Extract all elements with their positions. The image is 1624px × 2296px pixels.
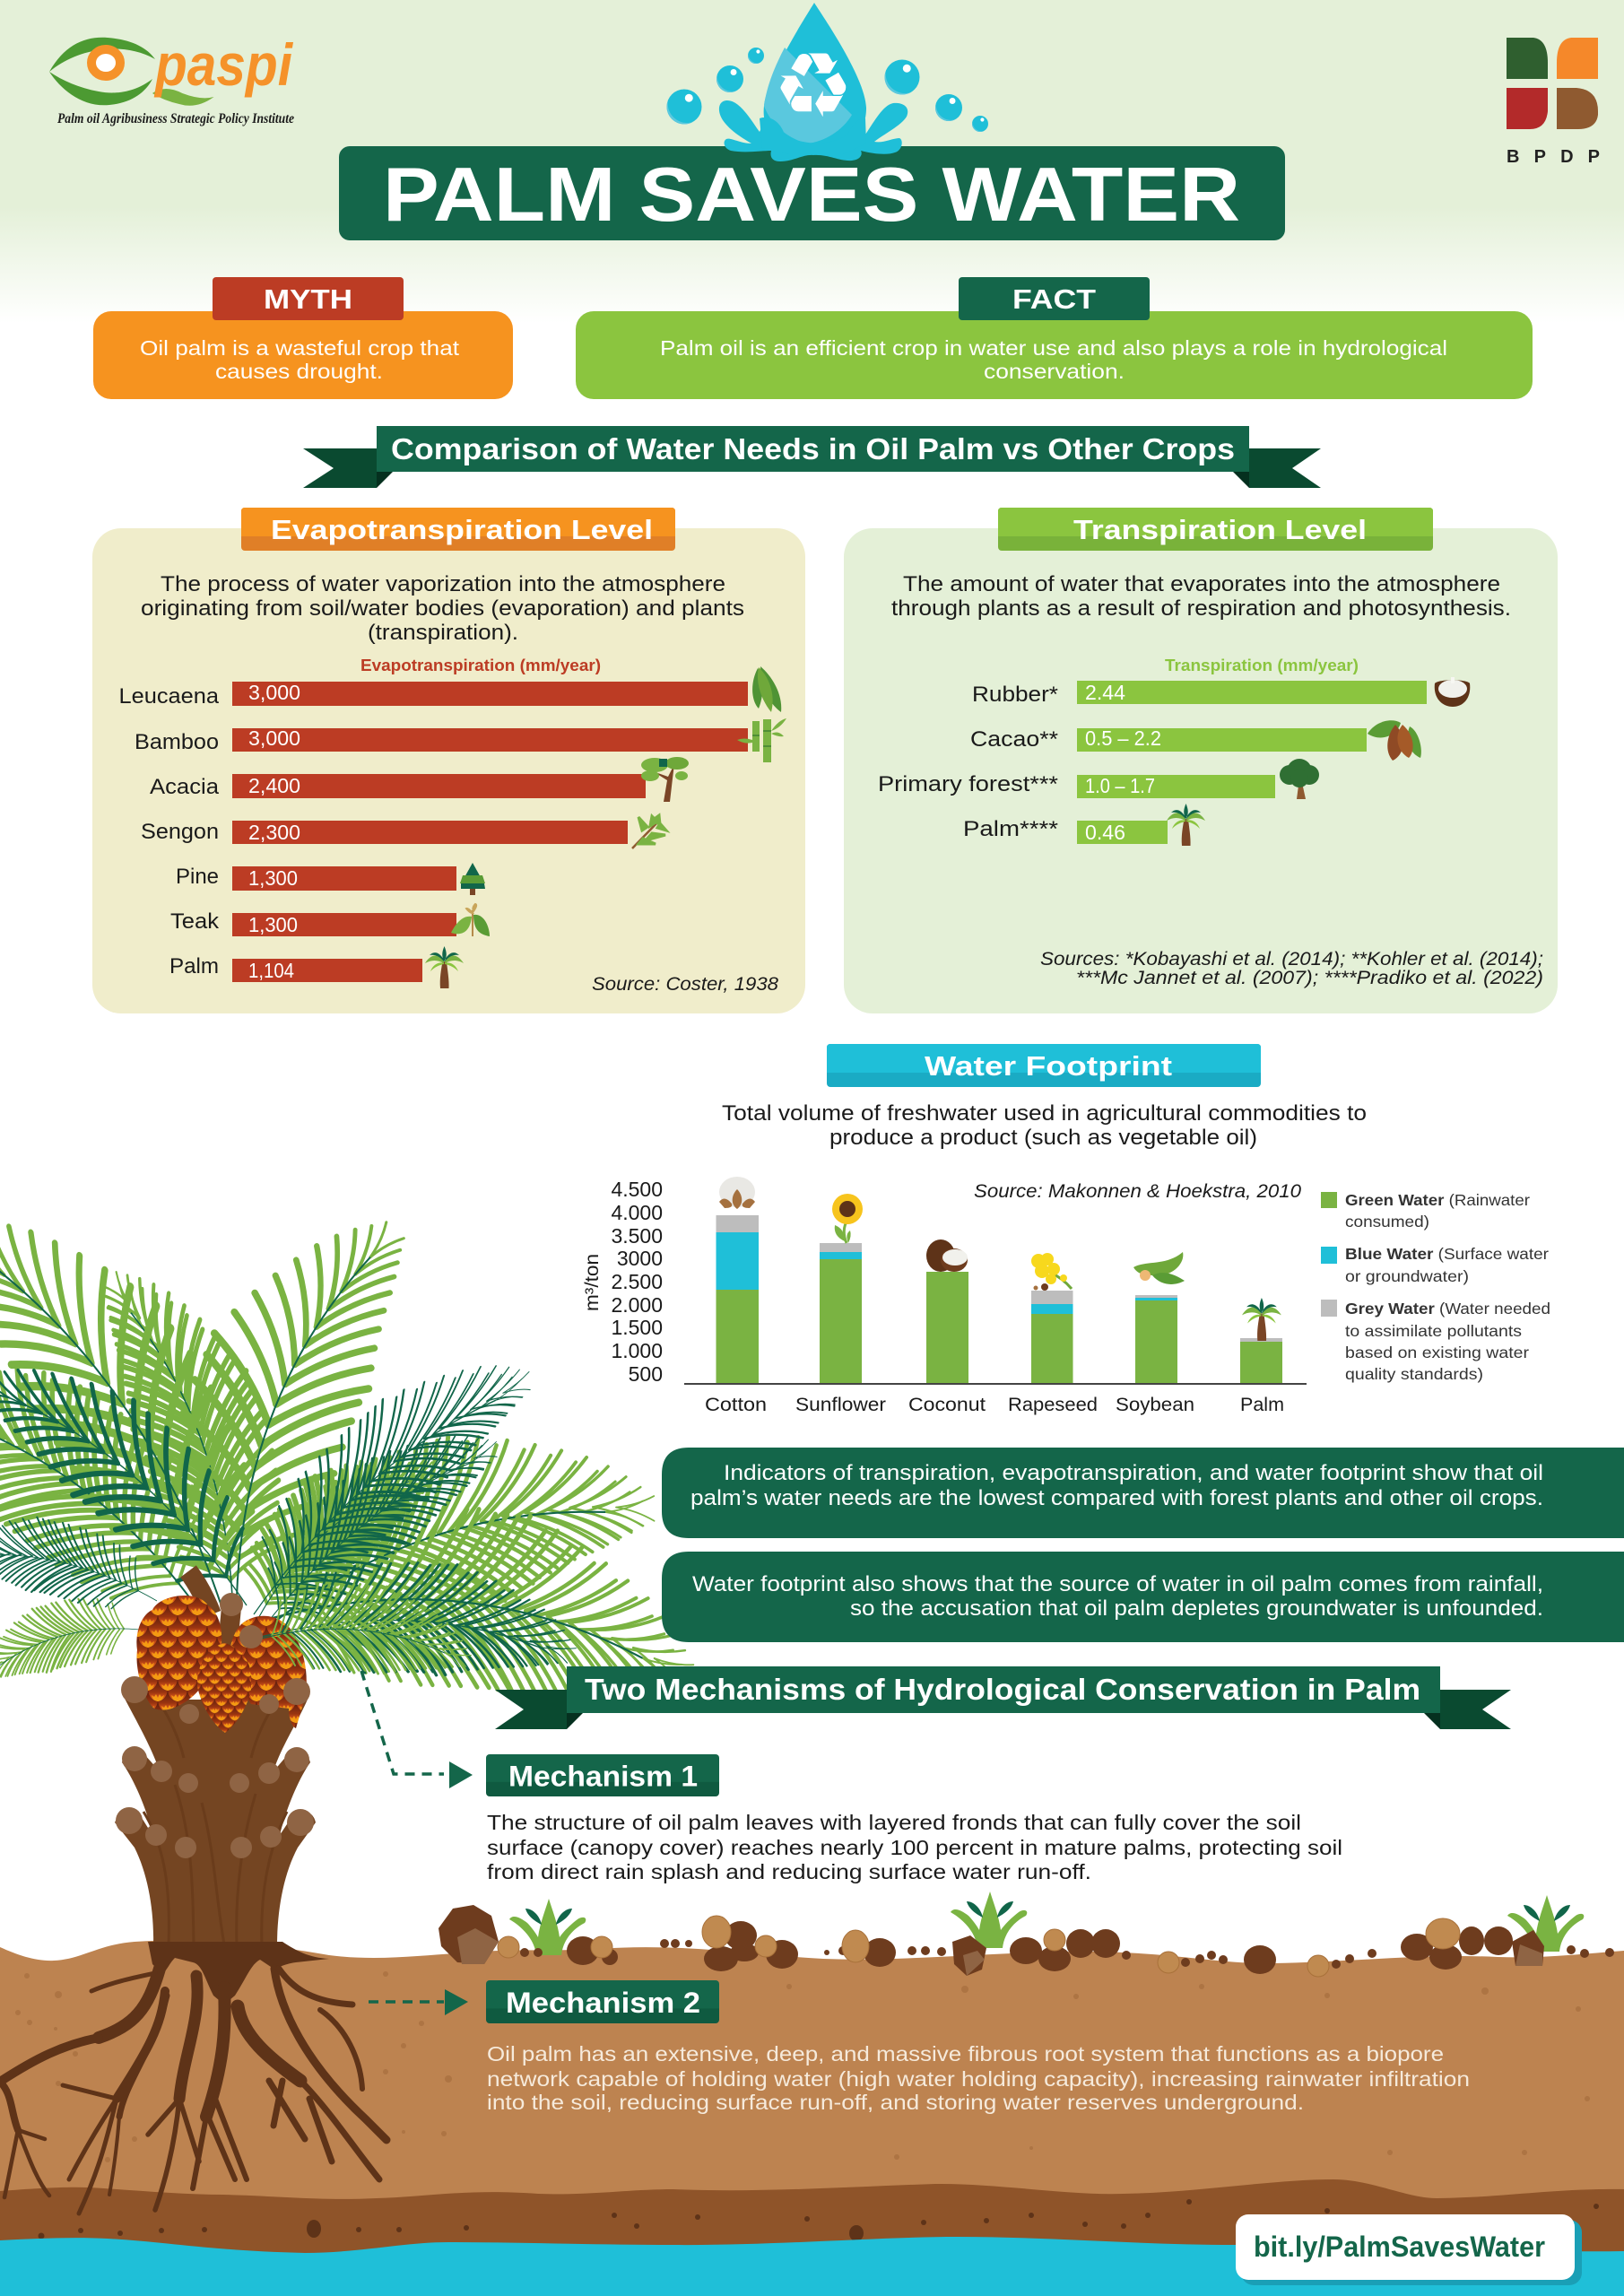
description text: (transpiration). bbox=[368, 621, 518, 645]
panel: mechanism 2: Mechanism 2 bbox=[506, 1987, 700, 2019]
palm trunk bbox=[115, 1683, 316, 1946]
stacked bar chart: m³/ton bbox=[582, 1254, 603, 1311]
heading ribbon: comparison: Comparison of Water Needs in Oil Palm vs Other Crops bbox=[391, 432, 1235, 465]
legend: to assimilate pollutants bbox=[1345, 1322, 1522, 1340]
icon: acacia tree bbox=[641, 757, 689, 802]
legend: or groundwater) bbox=[1345, 1267, 1469, 1285]
bar chart: evapotranspiration: 2,400 bbox=[248, 774, 300, 797]
callout: water needs: Indicators of transpiration, evapotranspiration, and water footprint show that oil bbox=[724, 1461, 1543, 1485]
panel: myth: causes drought. bbox=[215, 360, 383, 383]
panel: myth bbox=[93, 277, 513, 399]
icon: cacao bbox=[1368, 720, 1421, 761]
panel: mechanism 1: from direct rain splash and reducing surface water run-off. bbox=[487, 1860, 1091, 1883]
arrow: roots to mechanism 2 bbox=[369, 1989, 468, 2015]
link button: bit.ly/PalmSavesWater bbox=[1254, 2231, 1545, 2263]
source notes bbox=[1040, 949, 1543, 988]
icon: forest tree bbox=[1280, 759, 1319, 799]
stacked bar chart: 2.500 bbox=[611, 1270, 663, 1293]
header: water footprint: Water Footprint bbox=[925, 1050, 1172, 1082]
stacked bar chart: 1.500 bbox=[611, 1316, 663, 1339]
header: transpiration: Transpiration Level bbox=[1073, 514, 1367, 545]
logo: BPDP bbox=[1507, 38, 1600, 167]
ground plants and stones bbox=[439, 1892, 1614, 1977]
icon: soybean bbox=[1133, 1252, 1185, 1284]
palm stalks bbox=[188, 1571, 251, 1673]
icon: cotton bbox=[719, 1177, 755, 1209]
stacked bar chart: 4.500 bbox=[611, 1178, 663, 1201]
panel: mechanism 1: The structure of oil palm leaves with layered fronds that can fully cover the soil bbox=[487, 1811, 1301, 1834]
soil deep layer bbox=[0, 2179, 1624, 2296]
stacked bar chart: 500 bbox=[629, 1362, 663, 1386]
link button bbox=[1236, 2214, 1582, 2285]
icon: sunflower bbox=[832, 1194, 863, 1243]
icon: water drop with recycling symbol: ♻ bbox=[773, 33, 854, 138]
panel: transpiration level bbox=[844, 508, 1558, 1013]
panel: mechanism 2: Oil palm has an extensive, deep, and massive fibrous root system that functions as a biopore bbox=[487, 2042, 1444, 2066]
bar chart: evapotranspiration: Palm bbox=[169, 954, 219, 978]
icon: palm small bbox=[425, 946, 464, 988]
bar chart: transpiration: Palm**** bbox=[963, 817, 1058, 841]
panel: fact: FACT bbox=[1012, 283, 1096, 315]
bar chart: transpiration: 0.46 bbox=[1085, 821, 1125, 844]
stacked bar chart bbox=[582, 1178, 1307, 1415]
icon: pine tree bbox=[460, 863, 485, 895]
icon: palm small bbox=[1167, 804, 1205, 846]
palm roots bbox=[0, 1942, 386, 2213]
palm fronds back bbox=[0, 1162, 699, 1787]
legend: based on existing water bbox=[1345, 1344, 1529, 1361]
description text: Total volume of freshwater used in agricultural commodities to bbox=[722, 1101, 1367, 1126]
stacked bar chart: 4.000 bbox=[611, 1201, 663, 1224]
bar chart: transpiration: 0.5 – 2.2 bbox=[1085, 726, 1161, 750]
legend: consumed) bbox=[1345, 1213, 1429, 1231]
stacked bar chart: 1.000 bbox=[611, 1339, 663, 1362]
arrow: canopy to mechanism 1 bbox=[361, 1671, 473, 1788]
legend: Grey Water (Water needed bbox=[1345, 1300, 1550, 1318]
bar chart: transpiration: 2.44 bbox=[1085, 681, 1125, 704]
section: water footprint bbox=[582, 1044, 1550, 1415]
logo: paspi bbox=[49, 31, 294, 126]
icon: palm small bbox=[1242, 1298, 1281, 1341]
panel: mechanism 2: network capable of holding water (high water holding capacity), increasing rainwater infiltration bbox=[487, 2067, 1470, 2091]
panel: myth: MYTH bbox=[264, 283, 352, 315]
panel: myth: Oil palm is a wasteful crop that bbox=[140, 336, 460, 360]
bar chart: evapotranspiration: Pine bbox=[176, 865, 219, 889]
bar chart: evapotranspiration: 1,104 bbox=[248, 959, 294, 982]
illustration: oil palm tree bbox=[0, 1162, 699, 2213]
stacked bar chart: 3000 bbox=[617, 1247, 663, 1270]
bar chart: transpiration: Primary forest*** bbox=[878, 772, 1058, 796]
logo: paspi: Palm oil Agribusiness Strategic Policy Institute bbox=[56, 111, 294, 126]
callout: rainfall source bbox=[662, 1552, 1624, 1642]
logo: paspi: paspi bbox=[153, 31, 293, 98]
stacked bar chart: 3.500 bbox=[611, 1224, 663, 1248]
stacked bar chart: 2.000 bbox=[611, 1293, 663, 1317]
panel: fact: Palm oil is an efficient crop in water use and also plays a role in hydrological bbox=[660, 336, 1447, 360]
bar chart: evapotranspiration: Sengon bbox=[141, 820, 219, 844]
palm fruit bunches bbox=[136, 1596, 307, 1733]
panel: mechanism 2 bbox=[486, 1980, 1470, 2114]
chart title: Evapotranspiration (mm/year) bbox=[360, 657, 601, 674]
bar chart: evapotranspiration: 2,300 bbox=[248, 821, 300, 844]
stacked bar chart: Cotton bbox=[705, 1395, 767, 1415]
stacked bar chart: Rapeseed bbox=[1008, 1395, 1098, 1415]
stacked bar chart: Soybean bbox=[1116, 1395, 1194, 1415]
bar chart: evapotranspiration: 1,300 bbox=[248, 866, 298, 890]
description text: produce a product (such as vegetable oil) bbox=[829, 1126, 1257, 1150]
icon: coconut bbox=[926, 1239, 968, 1272]
bar chart: transpiration bbox=[878, 681, 1427, 844]
background gradient bbox=[0, 0, 1624, 323]
description text: The amount of water that evaporates into the atmosphere bbox=[903, 572, 1500, 596]
header: evapotranspiration bbox=[241, 508, 675, 551]
bar chart: evapotranspiration: Leucaena bbox=[118, 684, 220, 709]
panel: fact bbox=[576, 277, 1533, 399]
panel: evapotranspiration level bbox=[92, 508, 805, 1013]
heading ribbon: two mechanisms: Two Mechanisms of Hydrological Conservation in Palm bbox=[585, 1673, 1420, 1706]
legend bbox=[1321, 1191, 1550, 1383]
water table bbox=[0, 2199, 1624, 2296]
logo: BPDP: BPDP bbox=[1507, 147, 1600, 167]
icon: sengon leaf bbox=[632, 815, 666, 848]
panel: fact: conservation. bbox=[984, 360, 1125, 383]
stacked bar chart: Source: Makonnen & Hoekstra, 2010 bbox=[974, 1181, 1301, 1202]
callout: rainfall source: Water footprint also shows that the source of water in oil palm comes from rainfall, bbox=[692, 1572, 1543, 1596]
bar chart: evapotranspiration bbox=[118, 681, 748, 982]
bar chart: transpiration: 1.0 – 1.7 bbox=[1085, 774, 1155, 797]
bar chart: transpiration: Cacao** bbox=[970, 727, 1058, 752]
icon: leucaena bbox=[752, 666, 781, 712]
header: evapotranspiration: Evapotranspiration Level bbox=[271, 514, 653, 545]
callout: rainfall source: so the accusation that oil palm depletes groundwater is unfounded. bbox=[850, 1596, 1543, 1621]
title bar: PALM SAVES WATER bbox=[383, 152, 1240, 238]
stacked bar chart: Sunflower bbox=[795, 1395, 886, 1415]
source notes: ***Mc Jannet et al. (2007); ****Pradiko et al. (2022) bbox=[1076, 968, 1543, 988]
legend: Green Water (Rainwater bbox=[1345, 1191, 1530, 1209]
description text bbox=[891, 572, 1511, 621]
bar chart: evapotranspiration: 1,300 bbox=[248, 913, 298, 936]
soil ground bbox=[0, 1940, 1624, 2296]
description text bbox=[141, 572, 744, 645]
panel: mechanism 2: into the soil, reducing surface run-off, and storing water reserves underground. bbox=[487, 2091, 1304, 2114]
trunk frond stubs bbox=[116, 1593, 314, 1858]
panel: mechanism 1: Mechanism 1 bbox=[508, 1760, 698, 1792]
callout: water needs: palm’s water needs are the lowest compared with forest plants and other oil crops. bbox=[690, 1486, 1543, 1510]
bar chart: evapotranspiration: 3,000 bbox=[248, 681, 300, 704]
icon: water drop with recycling symbol bbox=[667, 3, 988, 161]
bar chart: evapotranspiration: 3,000 bbox=[248, 726, 300, 750]
header: water footprint bbox=[827, 1044, 1261, 1087]
chart title: Transpiration (mm/year) bbox=[1165, 657, 1359, 674]
heading ribbon: two mechanisms bbox=[495, 1666, 1511, 1729]
description text: originating from soil/water bodies (evaporation) and plants bbox=[141, 596, 744, 621]
panel: mechanism 1 bbox=[486, 1754, 1342, 1883]
description text: The process of water vaporization into the atmosphere bbox=[161, 572, 725, 596]
description text bbox=[722, 1101, 1367, 1150]
icon: teak leaf bbox=[451, 904, 490, 936]
header: transpiration bbox=[998, 508, 1433, 551]
source notes: Sources: *Kobayashi et al. (2014); **Kohler et al. (2014); bbox=[1040, 949, 1543, 970]
description text: through plants as a result of respiration and photosynthesis. bbox=[891, 596, 1511, 621]
source note: Source: Coster, 1938 bbox=[592, 974, 778, 995]
bar chart: transpiration: Rubber* bbox=[972, 683, 1058, 707]
callout: water needs bbox=[662, 1448, 1624, 1538]
heading ribbon: comparison bbox=[303, 426, 1321, 488]
bar chart: evapotranspiration: Acacia bbox=[150, 775, 220, 799]
bar chart: evapotranspiration: Teak bbox=[170, 909, 220, 934]
palm fronds front bbox=[239, 1516, 579, 1741]
legend: Blue Water (Surface water bbox=[1345, 1245, 1549, 1263]
icon: rapeseed bbox=[1031, 1253, 1072, 1291]
icon: rubber cup bbox=[1435, 677, 1470, 707]
legend: quality standards) bbox=[1345, 1365, 1483, 1383]
stacked bar chart: Coconut bbox=[908, 1395, 986, 1415]
stacked bar chart: Palm bbox=[1240, 1395, 1284, 1415]
panel: mechanism 1: surface (canopy cover) reaches nearly 100 percent in mature palms, protecting soil bbox=[487, 1836, 1342, 1859]
bar chart: evapotranspiration: Bamboo bbox=[135, 730, 219, 754]
icon: bamboo bbox=[737, 718, 786, 762]
